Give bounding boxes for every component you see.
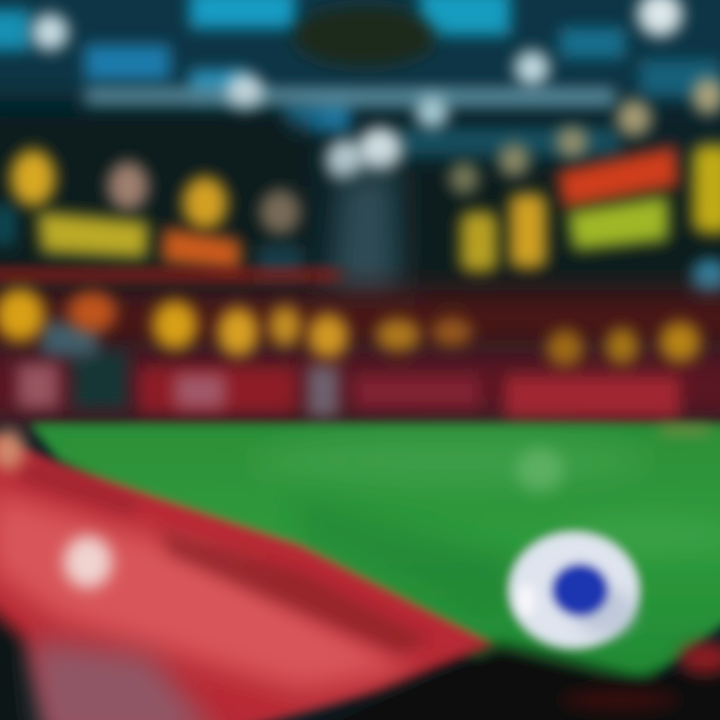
- green pitch: [30, 424, 720, 680]
- red lower stand with yellow crowd: [0, 270, 720, 422]
- roof with blue panels and lights: [0, 0, 720, 180]
- soccer ball: [509, 532, 639, 648]
- banners and spectators, right: [450, 78, 720, 272]
- dark upper stand: [0, 118, 720, 300]
- red foreground seating: [0, 425, 495, 720]
- floodlights: [32, 14, 68, 50]
- banners and spectators, left: [11, 150, 300, 270]
- dark roof centre: [293, 6, 437, 66]
- dark foreground shadow: [0, 590, 720, 720]
